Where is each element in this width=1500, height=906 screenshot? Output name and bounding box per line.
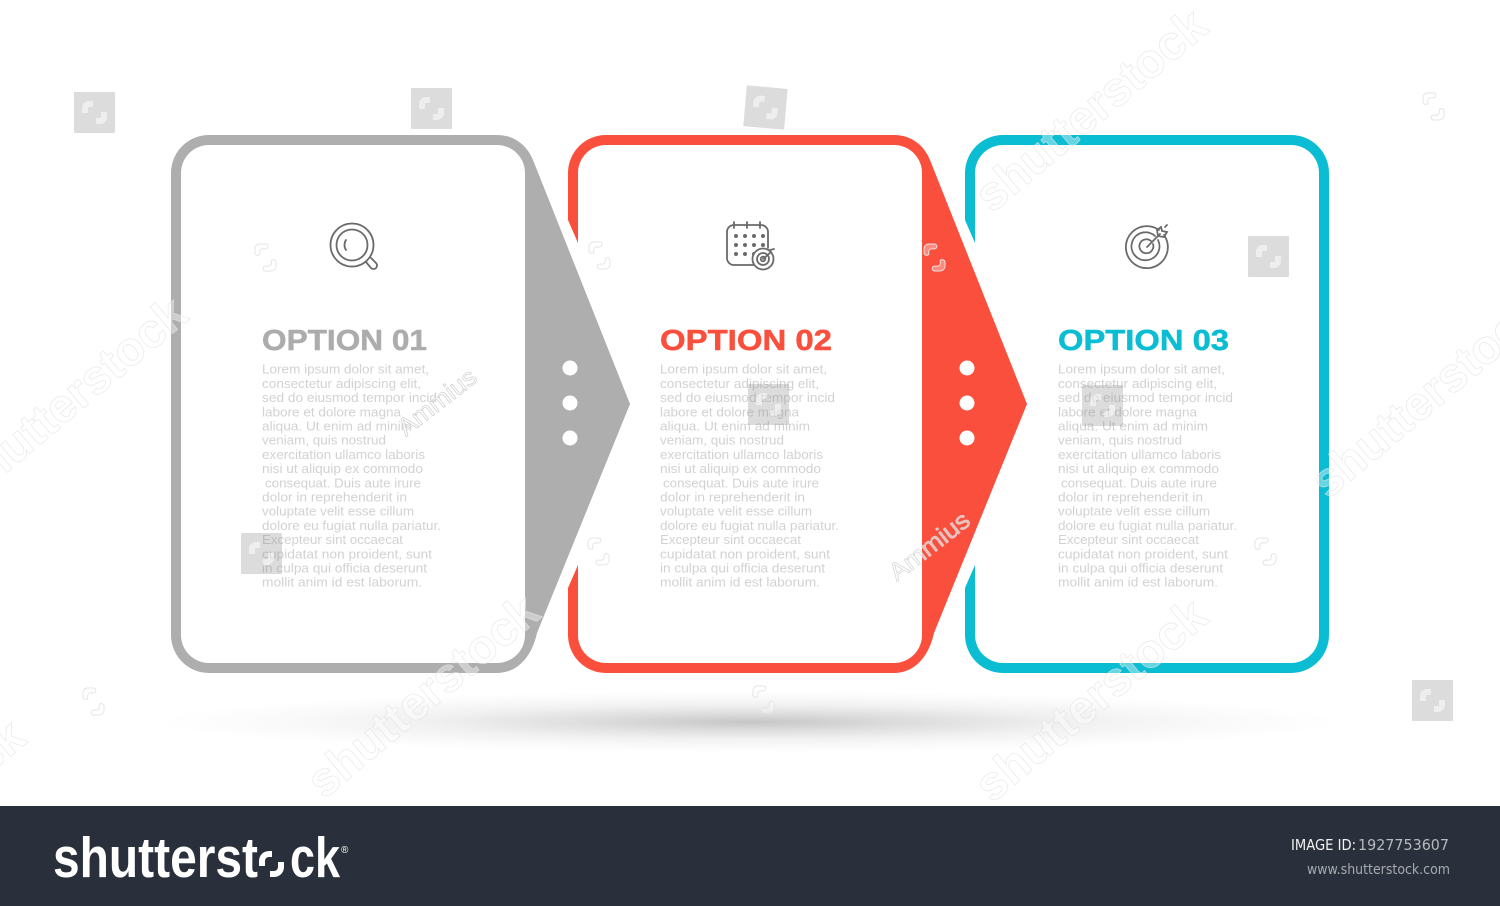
body text: option 03: Lorem ipsum dolor sit amet,	[1058, 362, 1225, 377]
body text: option 01: mollit anim id est laborum.	[262, 575, 422, 590]
body text: option 01: sed do eiusmod tempor incid	[262, 390, 437, 405]
arrow dots	[960, 360, 974, 446]
body text: option 03: mollit anim id est laborum.	[1058, 575, 1218, 590]
icon: target with arrow	[1126, 225, 1168, 268]
heading: option 01: OPTION 01	[262, 325, 427, 357]
body text: option 03: cupidatat non proident, sunt	[1058, 546, 1228, 561]
watermark: small outline marks	[83, 93, 1444, 715]
body text: option 01: exercitation ullamco laboris	[262, 447, 426, 462]
body text: option 03: sed do eiusmod tempor incid	[1058, 390, 1233, 405]
icon: magnifying glass	[330, 224, 377, 269]
image id: IMAGE ID:	[1291, 836, 1356, 854]
logo: shutterstock: ck	[290, 826, 340, 890]
logo: shutterstock: ®	[341, 845, 349, 856]
body text: option 01: Excepteur sint occaecat	[262, 532, 403, 547]
body text: option 01: consectetur adipiscing elit,	[262, 376, 421, 391]
panel: option 02	[568, 135, 1027, 673]
body text: option 03: labore et dolore magna	[1058, 404, 1198, 419]
image id	[1291, 836, 1449, 854]
body text: option 02: cupidatat non proident, sunt	[660, 546, 830, 561]
body text: option 02: aliqua. Ut enim ad minim	[660, 418, 810, 433]
body text: option 01: consequat. Duis aute irure	[265, 475, 421, 490]
body text: option 03: nisi ut aliquip ex commodo	[1058, 461, 1219, 476]
body text: option 02: dolor in reprehenderit in	[660, 489, 805, 504]
watermark: diagonal wordmarks: shutterstock	[965, 588, 1218, 812]
body text: option 03: exercitation ullamco laboris	[1058, 447, 1222, 462]
body text: option 01: aliqua. Ut enim ad minim	[262, 418, 412, 433]
body text: option 01: dolore eu fugiat nulla pariatur.	[262, 518, 441, 533]
watermark: diagonal wordmarks: shutterstock	[297, 584, 550, 808]
heading: option 03: OPTION 03	[1058, 325, 1229, 357]
body text: option 03: aliqua. Ut enim ad minim	[1058, 418, 1208, 433]
body text: option 02: consequat. Duis aute irure	[663, 475, 819, 490]
body text: option 02: in culpa qui officia deserunt	[660, 560, 825, 575]
logo: shutterstock: shutterst	[53, 826, 258, 890]
body text: option 02: sed do eiusmod tempor incid	[660, 390, 835, 405]
body text: option 01: Lorem ipsum dolor sit amet,	[262, 362, 429, 377]
body text: option 02: labore et dolore magna	[660, 404, 800, 419]
body text: option 02: dolore eu fugiat nulla pariatur.	[660, 518, 839, 533]
body text: option 02: mollit anim id est laborum.	[660, 575, 820, 590]
body text: option 03: dolore eu fugiat nulla pariatur.	[1058, 518, 1237, 533]
website: www.shutterstock.com	[1307, 862, 1450, 878]
body text: option 02: consectetur adipiscing elit,	[660, 376, 819, 391]
body text: option 03	[1058, 362, 1237, 590]
body text: option 03: Excepteur sint occaecat	[1058, 532, 1199, 547]
footer bar	[0, 806, 1500, 906]
body text: option 02: Lorem ipsum dolor sit amet,	[660, 362, 827, 377]
card and arrow outline: red	[568, 135, 1027, 673]
body text: option 02: veniam, quis nostrud	[660, 433, 784, 448]
body text: option 01: voluptate velit esse cillum	[262, 504, 414, 519]
body text: option 02: voluptate velit esse cillum	[660, 504, 812, 519]
card outline: blue	[965, 135, 1329, 673]
body text: option 01: cupidatat non proident, sunt	[262, 546, 432, 561]
body text: option 01: nisi ut aliquip ex commodo	[262, 461, 423, 476]
body text: option 01: veniam, quis nostrud	[262, 433, 386, 448]
watermark: contributor name, red arrow: Ammius	[883, 506, 976, 587]
body text: option 03: voluptate velit esse cillum	[1058, 504, 1210, 519]
icon: calendar with target	[727, 222, 774, 270]
body text: option 02: Excepteur sint occaecat	[660, 532, 801, 547]
body text: option 03: veniam, quis nostrud	[1058, 433, 1182, 448]
body text: option 02	[660, 362, 839, 590]
ground shadow	[160, 691, 1340, 753]
panel: option 01	[171, 135, 630, 673]
body text: option 03: dolor in reprehenderit in	[1058, 489, 1203, 504]
arrow dots	[562, 360, 578, 446]
watermark: square stamps	[74, 85, 1453, 721]
body text: option 01: dolor in reprehenderit in	[262, 489, 407, 504]
body text: option 01: labore et dolore magna	[262, 404, 402, 419]
body text: option 03: in culpa qui officia deserunt	[1058, 560, 1223, 575]
body text: option 03: consectetur adipiscing elit,	[1058, 376, 1217, 391]
body text: option 01	[262, 362, 441, 590]
watermark: contributor name, grey panel: Ammius	[392, 363, 482, 442]
card and arrow outline: grey	[171, 135, 630, 673]
body text: option 02: nisi ut aliquip ex commodo	[660, 461, 821, 476]
heading: option 02: OPTION 02	[660, 325, 832, 357]
body text: option 02: exercitation ullamco laboris	[660, 447, 824, 462]
image id: 1927753607	[1358, 836, 1449, 854]
body text: option 01: in culpa qui officia deserunt	[262, 560, 427, 575]
body text: option 03: consequat. Duis aute irure	[1061, 475, 1217, 490]
panel: option 03	[965, 135, 1329, 673]
watermark: diagonal wordmarks: shutterstock	[965, 0, 1218, 222]
